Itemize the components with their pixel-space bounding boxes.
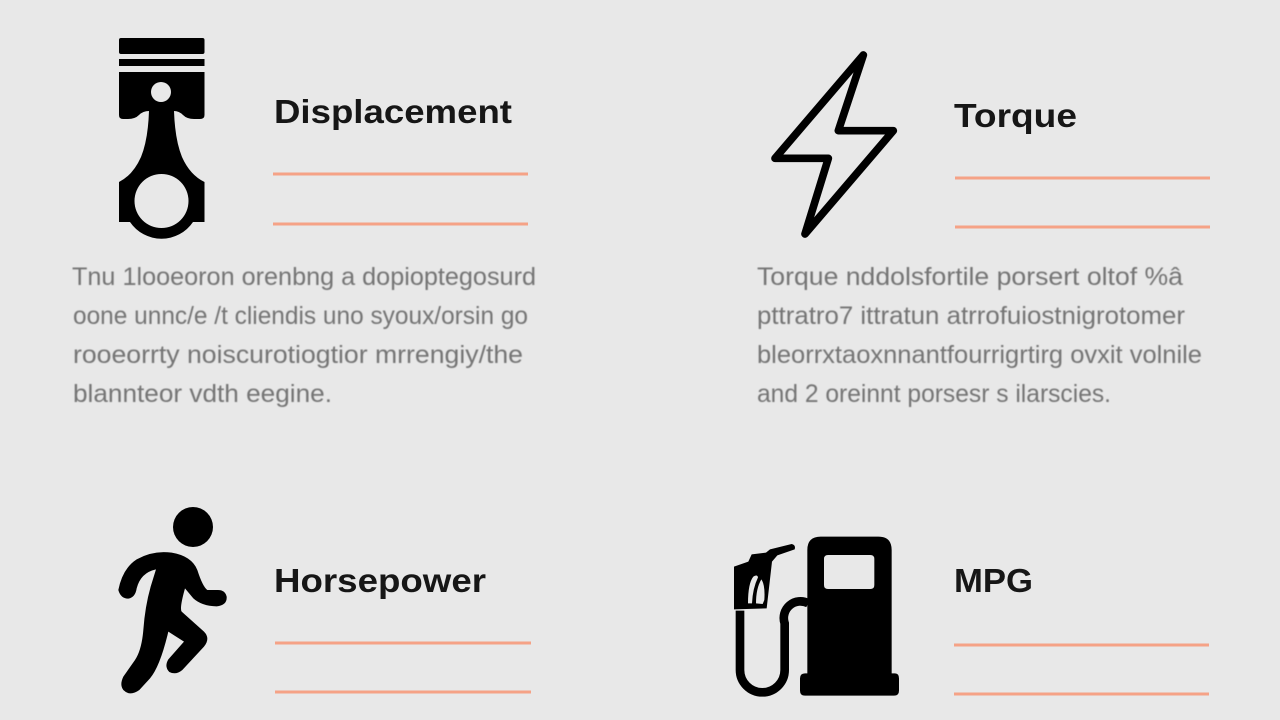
- panel: displacement: [72, 38, 536, 408]
- heading: MPG: MPG: [954, 562, 1033, 599]
- body text: blannteor vdth eegine.: [73, 380, 332, 408]
- body text: bleorrxtaoxnnantfourrigrtirg ovxit volnile: [757, 341, 1202, 369]
- panel: horsepower: [118, 507, 531, 693]
- heading: Torque: Torque: [954, 97, 1077, 134]
- body text: pttratro7 ittratun atrrofuiostnigrotomer: [757, 302, 1185, 330]
- icon: piston: [119, 38, 204, 239]
- heading: Displacement: Displacement: [274, 93, 512, 130]
- icon: fuel pump: [734, 537, 899, 696]
- body text: [757, 263, 1202, 408]
- answer lines: [954, 645, 1209, 694]
- body text: and 2 oreinnt porsesr s ilarscies.: [757, 380, 1111, 408]
- answer lines: [273, 174, 528, 224]
- body text: Tnu 1looeoron orenbng a dopioptegosurd: [72, 263, 536, 291]
- panel: mpg: [734, 537, 1209, 696]
- body text: Torque nddolsfortile porsert oltof %â: [757, 263, 1183, 291]
- answer lines: [955, 178, 1210, 227]
- body text: [72, 263, 536, 408]
- panel: torque: [757, 55, 1210, 408]
- body text: oone unnc/e /t cliendis uno syoux/orsin go: [73, 302, 528, 330]
- body text: rooeorrty noiscurotiogtior mrrengiy/the: [73, 341, 523, 369]
- icon: running person: [118, 507, 227, 693]
- answer lines: [275, 643, 531, 692]
- icon: lightning bolt: [775, 55, 893, 234]
- heading: Horsepower: Horsepower: [274, 562, 486, 599]
